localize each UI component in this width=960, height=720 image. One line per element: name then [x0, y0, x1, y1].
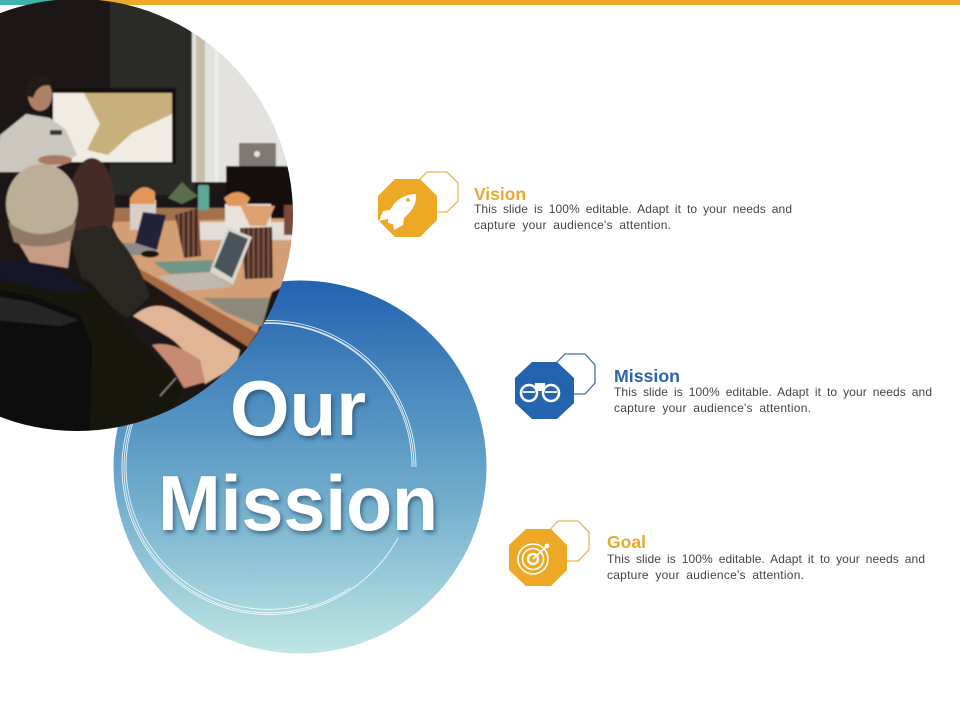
icon: binoculars octagon: [515, 354, 595, 419]
heading: Our Mission: [158, 364, 438, 547]
presenter: [0, 114, 77, 172]
icon: rocket octagon: [378, 172, 458, 237]
heading: Our Mission: Our: [230, 364, 366, 452]
icon: target octagon: [509, 521, 589, 586]
text block: capture your audience's attention.: [474, 218, 671, 232]
text block: This slide is 100% editable. Adapt it to your needs and: [607, 552, 925, 566]
photo: team meeting: [0, 0, 310, 440]
man in foreground: [0, 256, 184, 431]
text block: [607, 552, 925, 582]
heading: Goal: Goal: [607, 532, 646, 552]
text block: This slide is 100% editable. Adapt it to your needs and: [474, 202, 792, 216]
heading: Vision: Vision: [474, 184, 526, 204]
striped gift bags: [175, 208, 201, 258]
text block: This slide is 100% editable. Adapt it to your needs and: [614, 385, 932, 399]
text block: capture your audience's attention.: [607, 568, 804, 582]
blue circle: [114, 280, 486, 654]
text block: [614, 385, 932, 415]
text block: capture your audience's attention.: [614, 401, 811, 415]
text block: [474, 202, 792, 232]
papers on table: [203, 298, 270, 327]
plant and bottle: [168, 182, 198, 204]
table surface: [110, 218, 296, 333]
heading: Mission: Mission: [614, 366, 680, 386]
laptop two: [210, 227, 252, 285]
laptop one: [135, 212, 166, 250]
decorative rings: [122, 321, 416, 615]
top accent bar: [0, 0, 960, 5]
leather chair: [0, 290, 92, 431]
green folder: [153, 260, 213, 274]
knee and hands: [133, 306, 240, 384]
item: Goal: [509, 521, 925, 586]
white boxes and tissue: [130, 200, 156, 230]
window: [192, 30, 297, 182]
laptop on far table: [239, 143, 276, 166]
item: Vision: [378, 172, 792, 237]
presentation screen: [50, 88, 176, 164]
heading: Our Mission: Mission: [158, 459, 438, 547]
item: Mission: [515, 354, 932, 419]
neck and head: [18, 240, 72, 270]
shadow under table: [151, 292, 246, 356]
woman: [72, 157, 116, 231]
back wall furniture: [110, 208, 230, 222]
